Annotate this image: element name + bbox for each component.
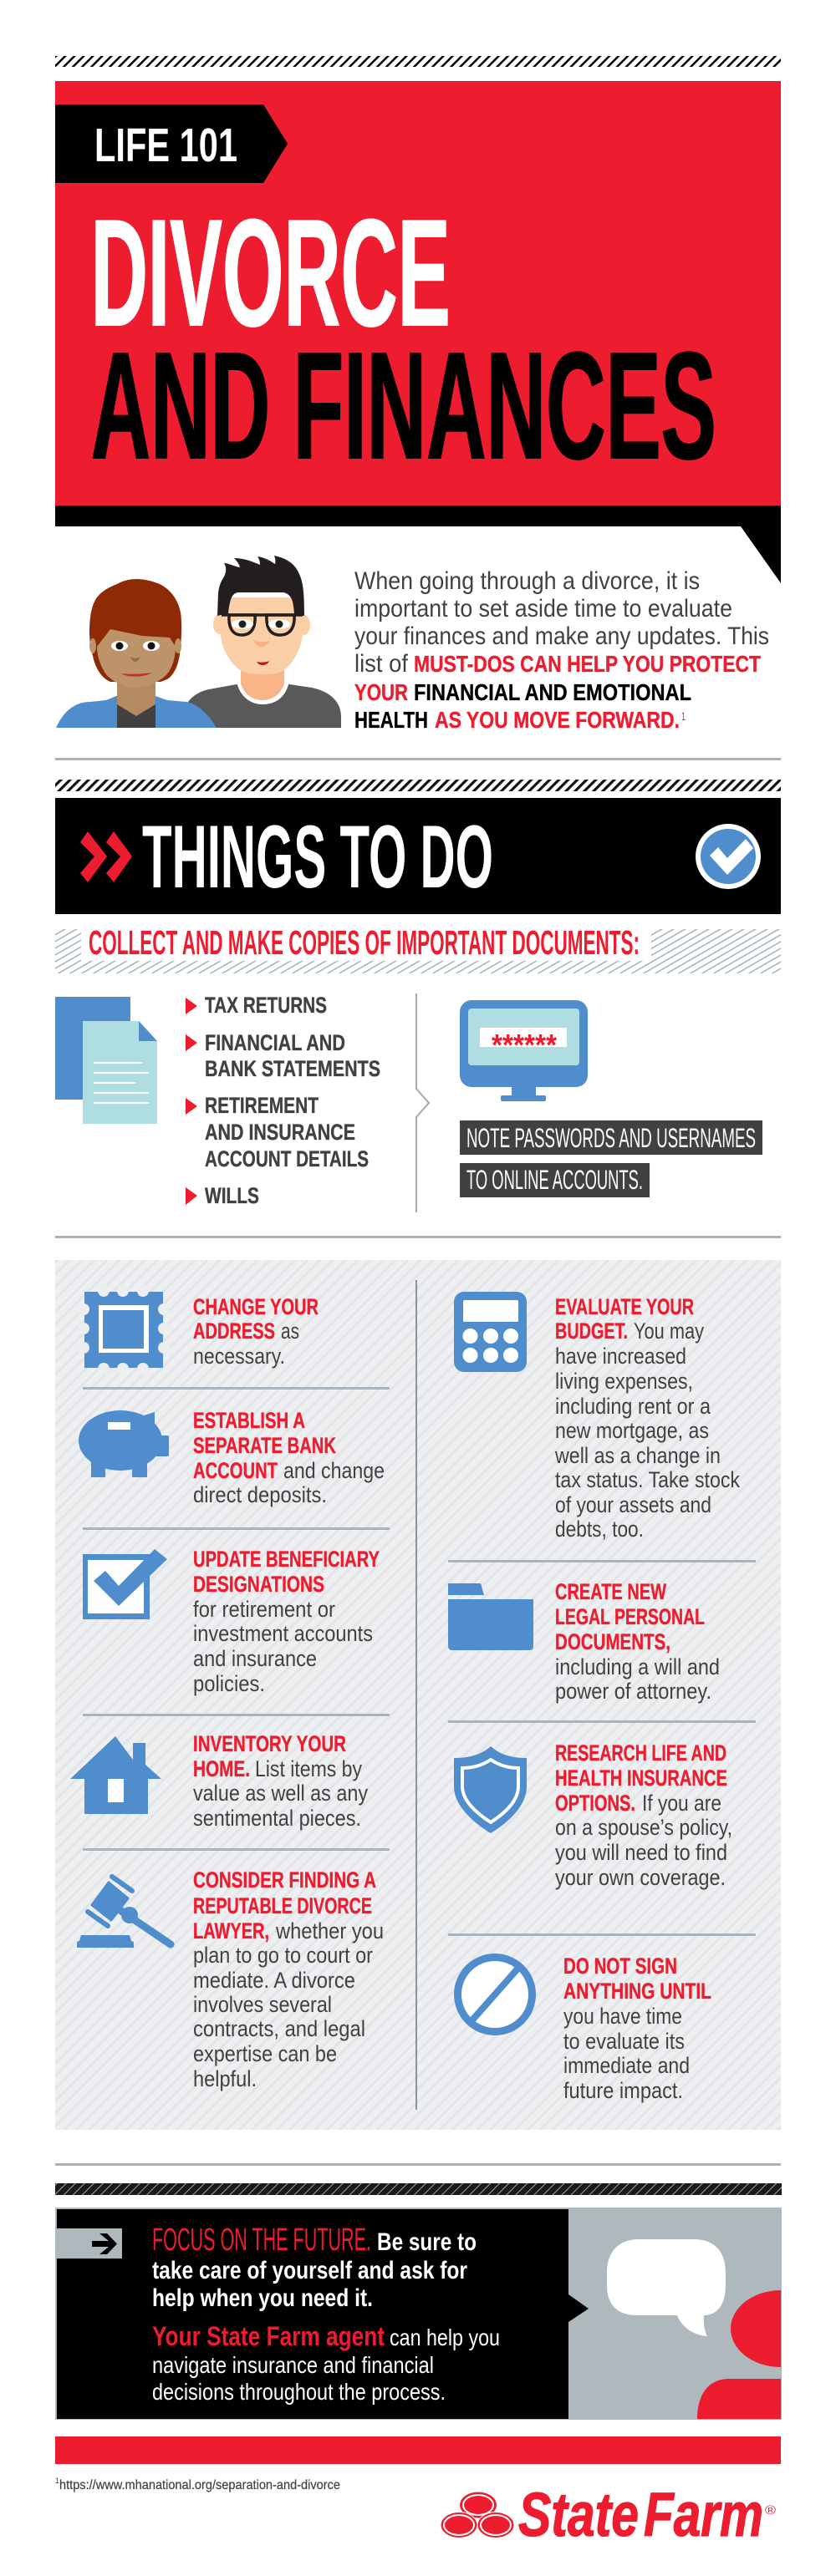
text: divorce lawyer: contracts, and legal [193,2016,365,2041]
text: divorce lawyer: involves several [193,1992,332,2017]
text: insurance options [555,1740,732,1890]
icon: house [70,1736,161,1814]
intro paragraph: list of [354,650,409,678]
text: do not sign: DO NOT SIGN [563,1954,677,1979]
text: legal documents: DOCUMENTS, [555,1629,670,1654]
intro paragraph: MUST-DOS CAN HELP YOU PROTECT [414,651,761,677]
text: focus on the future: navigate insurance and financial [152,2352,434,2378]
text: evaluate budget: of your assets and [555,1492,711,1517]
text: divorce lawyer: mediate. A divorce [193,1968,355,1993]
text: separate bank account: and change [283,1458,385,1483]
text: focus on the future: Your State Farm agent [152,2321,385,2351]
text: change address: ADDRESS [193,1318,275,1344]
heading: things to do: THINGS TO DO [142,806,493,907]
item: legal documents [448,1579,720,1704]
text: legal documents [555,1579,720,1704]
text: insurance options: your own coverage. [555,1865,726,1890]
icon: stamp [78,1285,170,1374]
text: evaluate budget: including rent or a [555,1394,711,1419]
text: change address: as [281,1318,299,1344]
subheading band: collect documents [55,923,781,973]
icon: shield [454,1746,527,1833]
illustration: couple [56,556,341,728]
panel: focus on the future [55,2208,831,2420]
document list: ACCOUNT DETAILS [205,1146,369,1171]
text: inventory home [193,1731,369,1831]
item: inventory home [70,1731,369,1831]
text: separate bank account: ACCOUNT [193,1458,278,1483]
text: update beneficiary: UPDATE BENEFICIARY [193,1547,380,1572]
text: do not sign: ANYTHING UNTIL [563,1979,711,2004]
text: insurance options: HEALTH INSURANCE [555,1766,727,1791]
text: focus on the future: FOCUS ON THE FUTURE. [152,2223,371,2258]
text: insurance options: you will need to find [555,1840,727,1865]
text: update beneficiary: investment accounts [193,1621,373,1646]
intro paragraph: important to set aside time to evaluate [354,595,732,622]
text: evaluate budget: tax status. Take stock [555,1467,741,1492]
wordmark: ® [765,2503,776,2518]
arrow divider [416,993,429,1212]
badge: Life 101: LIFE 101 [94,119,237,172]
woman [56,579,217,728]
text: update beneficiary: policies. [193,1671,265,1696]
text: divorce lawyer: LAWYER, [193,1918,269,1943]
text: insurance options: on a spouse’s policy, [555,1815,732,1840]
black bar with corner tail [55,506,781,583]
icon: folder [448,1583,533,1650]
text: inventory home: value as well as any [193,1781,369,1806]
callout: note passwords: TO ONLINE ACCOUNTS. [466,1165,643,1195]
icon: checkbox [83,1549,167,1619]
pointer notch [568,2294,589,2322]
text: evaluate budget: well as a change in [554,1443,721,1468]
document list: FINANCIAL AND [205,1030,345,1055]
text: inventory home: List items by [255,1756,363,1781]
intro paragraph: YOUR [354,679,408,705]
illustration: agent with speech bubble [607,2239,781,2419]
wordmark: Farm [644,2480,763,2549]
icon: monitor with password [460,1000,588,1101]
text: focus on the future: decisions throughout the process. [152,2379,446,2405]
wordmark: State [518,2480,639,2549]
icon: documents [55,997,157,1124]
text: divorce lawyer: REPUTABLE DIVORCE [193,1893,372,1918]
text: do not sign: you have time [563,2004,682,2029]
text: focus on the future: help when you need it. [152,2284,373,2312]
text: separate bank account: SEPARATE BANK [193,1433,337,1458]
panel: checklist [55,1260,781,2130]
icon: prohibited sign [458,1957,532,2032]
icon: three ovals [441,2492,514,2538]
text: change address: CHANGE YOUR [193,1294,319,1319]
icon: piggy bank [79,1410,169,1477]
text: divorce lawyer: whether you [275,1918,384,1943]
decorative stripe band: top [55,56,781,67]
logo: State Farm [441,2480,776,2549]
document list: RETIREMENT [205,1093,319,1118]
icon: monitor with password: ****** [492,1028,557,1062]
text: evaluate budget [554,1294,741,1542]
tab with arrow [56,2228,122,2258]
text: update beneficiary [193,1547,380,1696]
text: evaluate budget: debts, too. [555,1517,644,1542]
text: do not sign: future impact. [563,2078,683,2103]
text: divorce lawyer: plan to go to court or [193,1943,373,1968]
footnote: https://www.mhanational.org/separation-and-divorce [59,2478,340,2492]
text: inventory home: INVENTORY YOUR [193,1731,346,1756]
text: evaluate budget: new mortgage, as [555,1418,709,1443]
intro paragraph [354,567,769,733]
document list: WILLS [205,1183,259,1208]
text: focus on the future: can help you [390,2324,500,2350]
text: legal documents: LEGAL PERSONAL [555,1604,705,1629]
text: update beneficiary: and insurance [193,1646,317,1671]
text: evaluate budget: BUDGET. [555,1318,628,1344]
text: insurance options: RESEARCH LIFE AND [555,1740,726,1766]
text: separate bank account: ESTABLISH A [193,1408,305,1433]
text: inventory home: HOME. [193,1756,250,1781]
item: separate bank account [79,1408,385,1507]
text: do not sign [563,1954,711,2103]
decorative stripe band: call to action [55,2183,782,2195]
header panel [55,81,781,583]
intro paragraph: FINANCIAL AND EMOTIONAL [414,679,691,705]
text: focus on the future: take care of yourself and ask for [152,2257,467,2284]
text: legal documents: CREATE NEW [555,1579,667,1604]
text: focus on the future [152,2223,500,2405]
title line: Divorce: DIVORCE [90,186,450,358]
text: update beneficiary: DESIGNATIONS [193,1572,324,1597]
text: divorce lawyer: helpful. [193,2066,257,2091]
footnote: 1 [55,2477,59,2485]
text: update beneficiary: for retirement or [193,1597,335,1622]
text: insurance options: OPTIONS. [555,1791,635,1816]
badge: Life 101 [55,104,288,183]
document list [186,993,380,1208]
text: divorce lawyer [193,1867,384,2091]
item: do not sign [458,1954,711,2103]
text: separate bank account: direct deposits. [193,1482,327,1507]
document list: AND INSURANCE [205,1120,355,1145]
text: evaluate budget: You may [634,1318,705,1344]
text: separate bank account [193,1408,385,1507]
icon: red chevrons [80,831,132,882]
text: divorce lawyer: CONSIDER FINDING A [193,1867,376,1893]
text: evaluate budget: EVALUATE YOUR [555,1294,694,1319]
red footer bar [55,2436,781,2464]
icon: check badge [696,824,761,889]
text: legal documents: including a will and [555,1654,720,1679]
text: insurance options: If you are [642,1791,721,1816]
text: do not sign: immediate and [563,2053,690,2078]
item: change address [78,1285,319,1374]
text: change address: necessary. [193,1344,285,1369]
item: update beneficiary [83,1547,380,1696]
wordmark [518,2480,776,2549]
intro paragraph: your finances and make any updates. This [354,622,769,650]
item: insurance options [454,1740,732,1890]
man [188,556,341,728]
text: change address [193,1294,319,1369]
intro paragraph: AS YOU MOVE FORWARD. [435,707,680,733]
intro paragraph: 1 [681,709,686,723]
text: evaluate budget: living expenses, [555,1369,693,1394]
item: evaluate budget [454,1292,741,1542]
document list: TAX RETURNS [205,993,327,1018]
icon: gavel [77,1877,171,1948]
text: divorce lawyer: expertise can be [193,2041,337,2066]
text: focus on the future: Be sure to [377,2228,477,2256]
text: evaluate budget: have increased [555,1344,686,1369]
text: inventory home: sentimental pieces. [193,1806,361,1831]
item: divorce lawyer [77,1867,384,2091]
intro paragraph: When going through a divorce, it is [354,567,700,595]
text: legal documents: power of attorney. [555,1679,711,1704]
document list: BANK STATEMENTS [205,1056,380,1081]
intro paragraph: HEALTH [354,707,428,733]
text: do not sign: to evaluate its [563,2029,685,2054]
callout: note passwords [460,1120,762,1197]
section banner: things to do [55,798,781,914]
icon: calculator [454,1292,527,1372]
decorative stripe band: things to do [55,780,781,791]
